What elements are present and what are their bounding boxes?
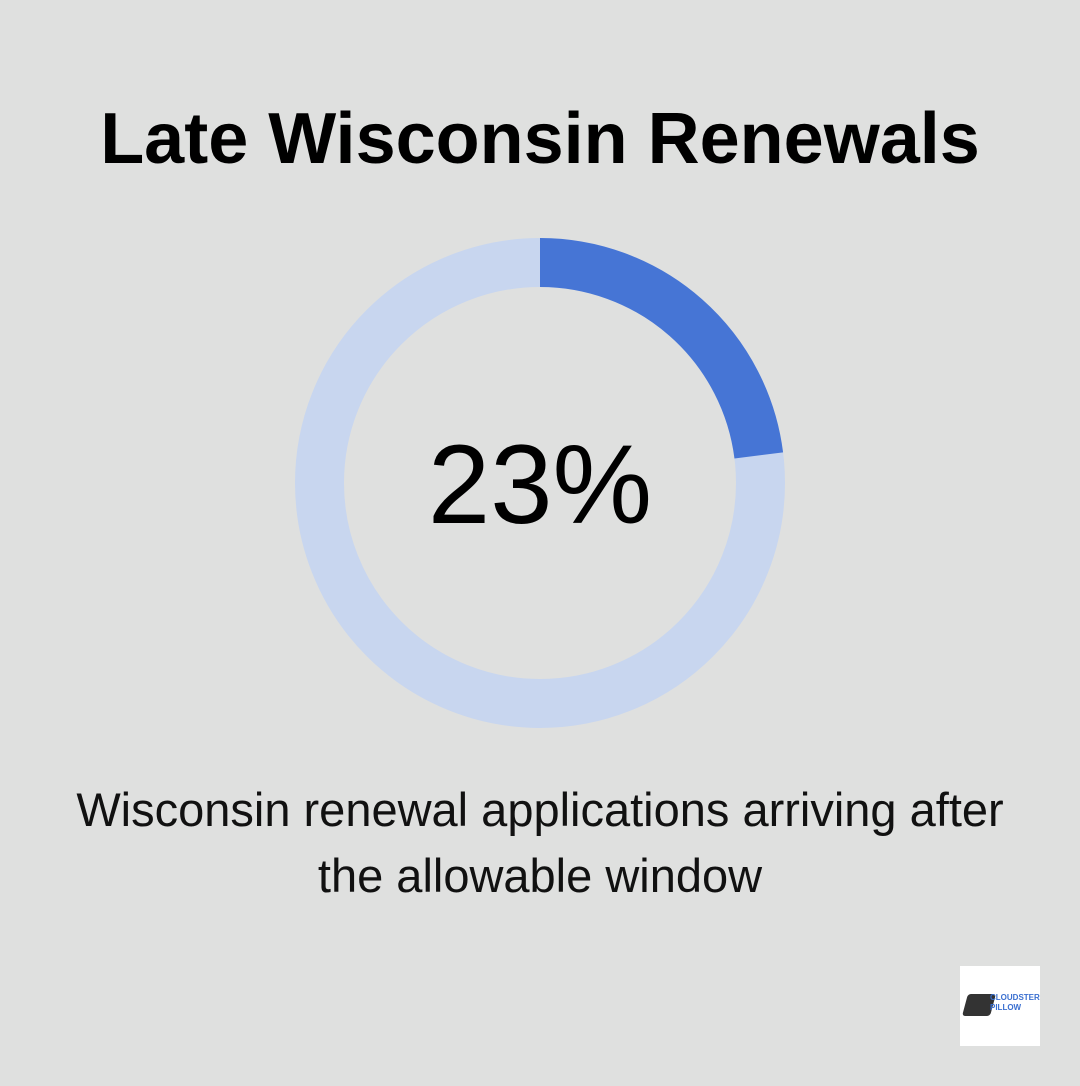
caption: the allowable window <box>318 849 762 902</box>
caption <box>76 783 1004 902</box>
logo: CLOUDSTER <box>990 993 1040 1002</box>
logo <box>960 966 1040 1046</box>
logo: PILLOW <box>990 1003 1021 1012</box>
caption: Wisconsin renewal applications arriving after <box>76 783 1004 836</box>
title: Late Wisconsin Renewals <box>100 99 980 179</box>
percentage value: 23% <box>428 422 652 547</box>
